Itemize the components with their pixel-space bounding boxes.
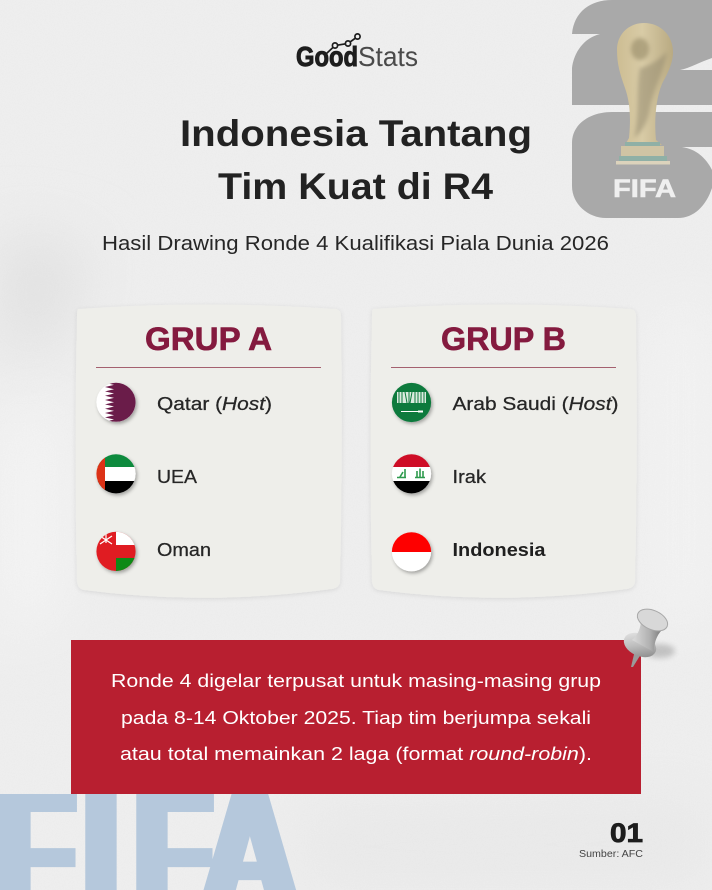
callout: red info box bbox=[71, 640, 641, 794]
logo: 26 FIFA with trophy bbox=[572, 0, 712, 218]
flag: UEA bbox=[96, 454, 137, 494]
background word: FIFA bbox=[0, 794, 296, 890]
logo: GoodStats: Good bbox=[296, 41, 358, 72]
label: Qatar: Qatar ( Host ) bbox=[157, 394, 272, 414]
label: Arab Saudi: Arab Saudi ( Host ) bbox=[452, 394, 618, 414]
callout: red info box: pada 8-14 Oktober 2025. Tiap tim berjumpa sekali bbox=[121, 707, 591, 728]
logo: GoodStats bbox=[296, 34, 418, 72]
title: Indonesia Tantang bbox=[180, 113, 532, 154]
label: UEA: UEA bbox=[157, 467, 197, 487]
label: Oman: Oman bbox=[157, 540, 211, 560]
panel: Grup A bbox=[76, 304, 342, 598]
icon: push pin bbox=[620, 605, 675, 667]
title: Tim Kuat di R4 bbox=[218, 166, 493, 207]
callout: red info box: atau total memainkan 2 laga (format round-robin ). bbox=[120, 743, 592, 764]
source: Sumber: AFC bbox=[579, 848, 643, 860]
numeral 6 bbox=[572, 112, 712, 218]
subtitle: Hasil Drawing Ronde 4 Kualifikasi Piala Dunia 2026 bbox=[102, 233, 609, 255]
heading: Grup B: GRUP B bbox=[441, 321, 566, 357]
flag: Irak bbox=[391, 454, 432, 494]
flag: Indonesia bbox=[391, 532, 432, 572]
label: Irak: Irak bbox=[452, 467, 487, 487]
trend line icon bbox=[326, 34, 360, 54]
title bbox=[180, 113, 532, 207]
label: Indonesia: Indonesia bbox=[452, 540, 547, 560]
flag: Oman bbox=[96, 531, 137, 572]
heading: Grup A: GRUP A bbox=[145, 321, 272, 357]
page number: 01 bbox=[610, 818, 643, 848]
logo: GoodStats: Stats bbox=[358, 41, 418, 72]
panel: Grup B bbox=[370, 304, 637, 598]
flag: Arab Saudi bbox=[391, 382, 432, 423]
FIFA wordmark: FIFA bbox=[613, 175, 676, 203]
callout: red info box: Ronde 4 digelar terpusat untuk masing-masing grup bbox=[111, 670, 601, 691]
numeral 2 bbox=[572, 0, 712, 105]
flag: Qatar bbox=[96, 382, 136, 423]
trophy bbox=[616, 23, 673, 164]
